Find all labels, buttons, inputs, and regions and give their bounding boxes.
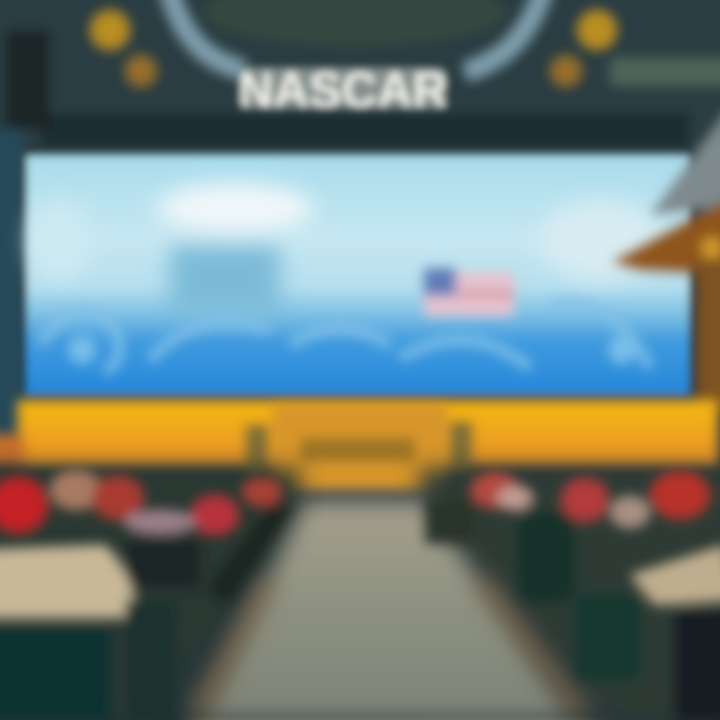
left pillar <box>0 130 24 450</box>
right audience seats <box>420 468 720 720</box>
aisle brown edges <box>195 580 585 715</box>
left audience seats <box>0 468 300 720</box>
arches <box>168 0 545 72</box>
screen clouds and building <box>30 184 660 315</box>
green bar <box>610 58 720 86</box>
right wooden structure <box>612 100 720 410</box>
screen waves <box>40 303 650 372</box>
top dark truss band <box>0 0 720 150</box>
floor aisle <box>200 500 575 720</box>
overhead sign: NASCAR <box>238 62 448 118</box>
left seats detail <box>0 470 295 720</box>
video screen <box>26 155 690 395</box>
bottom edge underlay <box>0 680 720 720</box>
orange band <box>0 400 718 466</box>
stage lights <box>90 10 617 87</box>
flag <box>424 268 514 316</box>
right seats detail <box>425 471 720 720</box>
centre podium sign <box>246 404 472 490</box>
